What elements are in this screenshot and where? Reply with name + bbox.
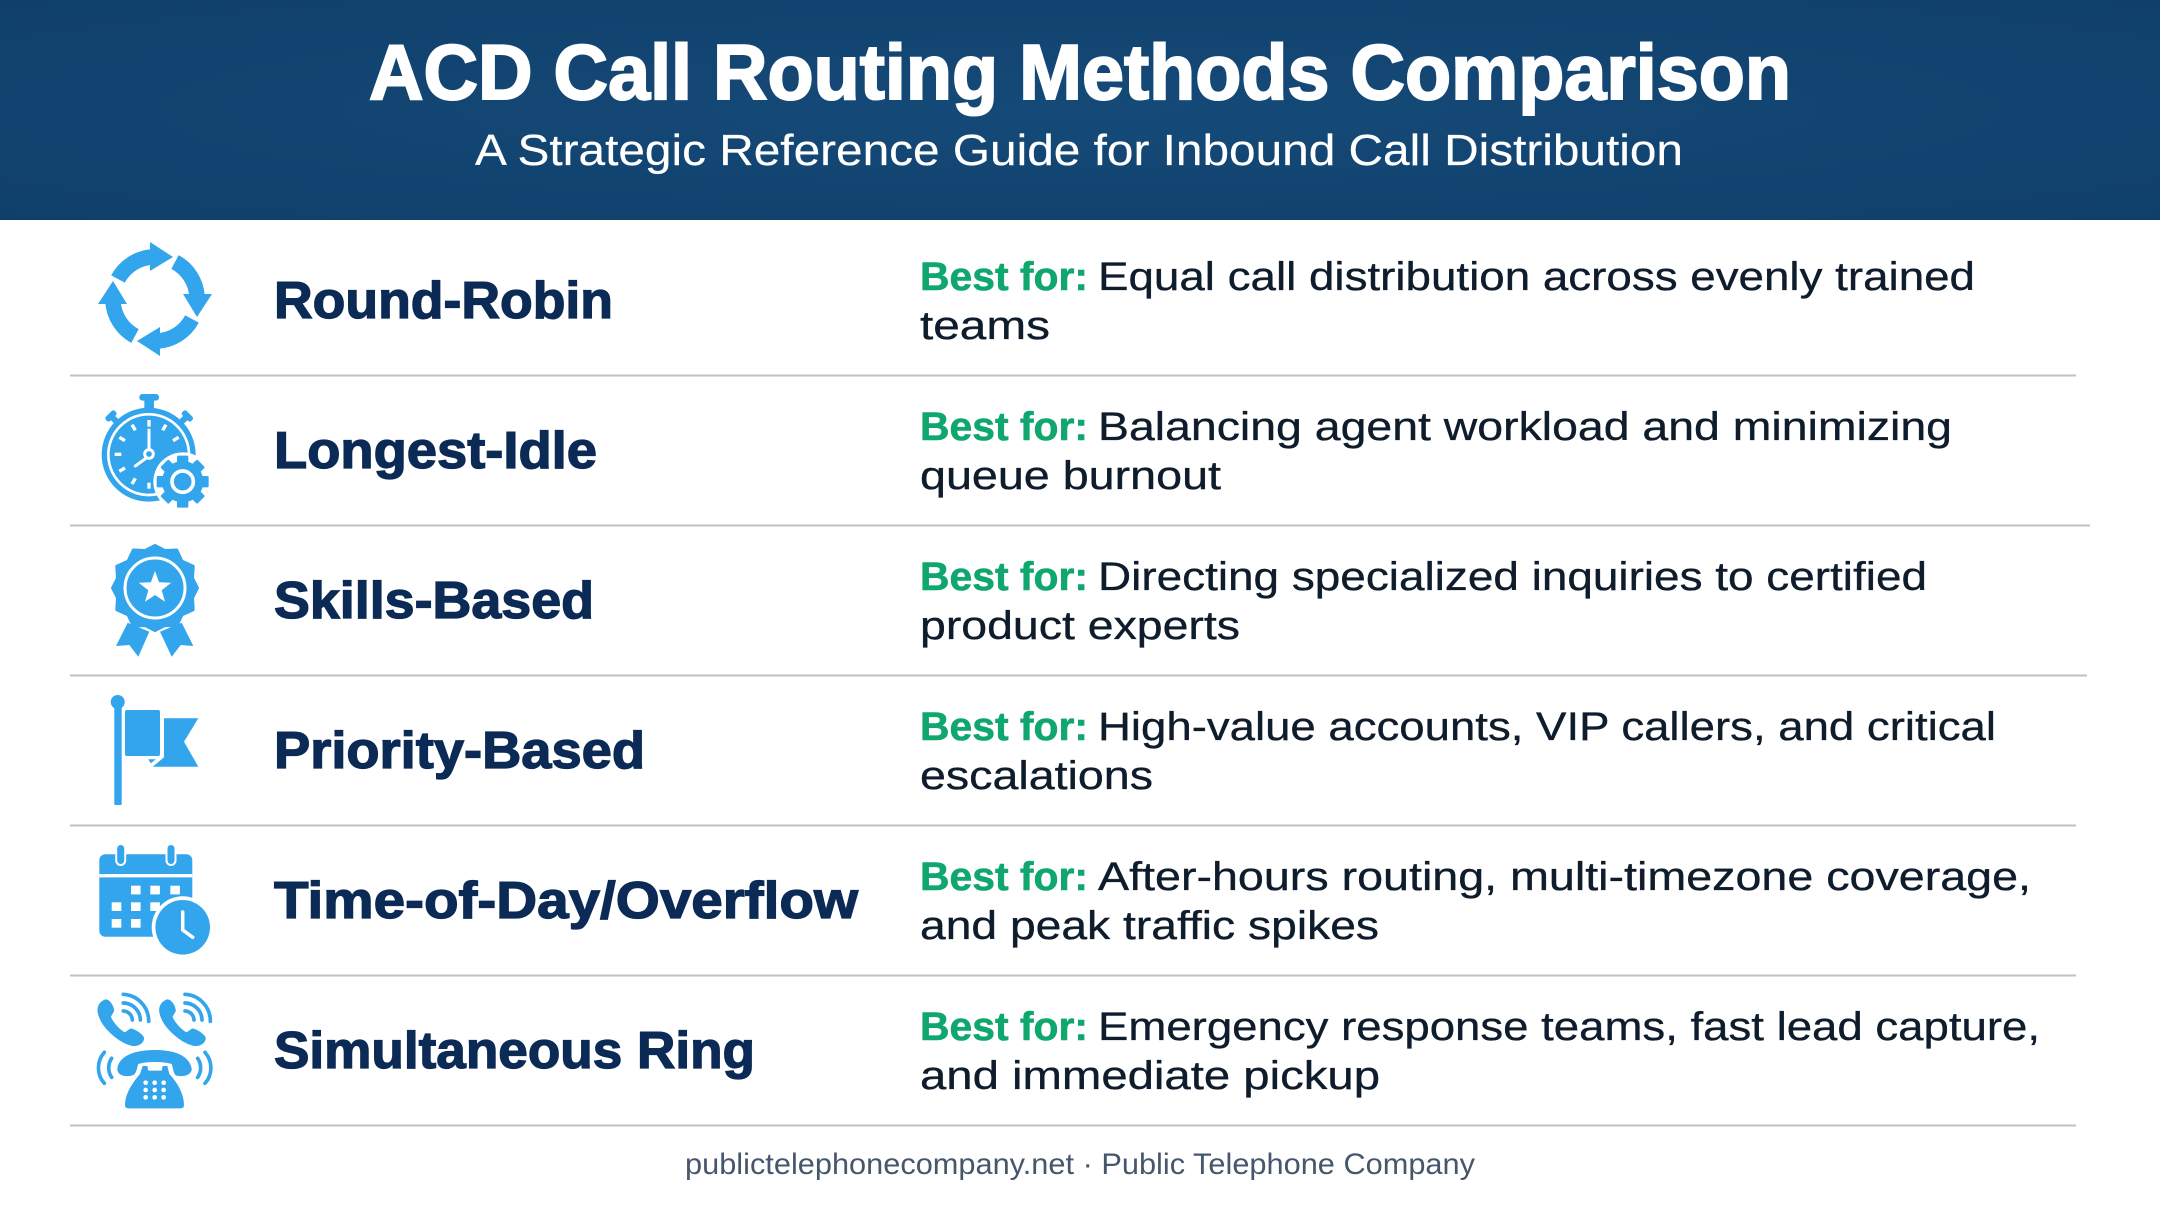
best for text: Best for: — [920, 255, 1088, 299]
row: Skills-Based — [112, 546, 1927, 657]
icon: stopwatch with gear — [102, 394, 212, 511]
best for text: Balancing agent workload and minimizing — [1098, 405, 1952, 449]
icon: award badge — [112, 546, 198, 657]
header banner — [0, 0, 2160, 220]
icon: calendar with clock — [99, 844, 214, 958]
row: Longest-Idle — [102, 394, 1952, 511]
method name: Simultaneous Ring — [274, 1022, 755, 1080]
best for text: escalations — [920, 754, 1153, 798]
title: ACD Call Routing Methods Comparison — [369, 28, 1791, 116]
best for text: product experts — [920, 604, 1240, 648]
best for text — [920, 255, 1975, 348]
best for text: Best for: — [920, 405, 1088, 449]
best for text: Best for: — [920, 555, 1088, 599]
best for text: High-value accounts, VIP callers, and critical — [1098, 705, 1996, 749]
best for text: teams — [920, 304, 1050, 348]
best for text — [920, 405, 1952, 498]
best for text: and peak traffic spikes — [920, 904, 1379, 948]
method name: Time-of-Day/Overflow — [274, 872, 859, 930]
best for text: queue burnout — [920, 454, 1221, 498]
row: Time-of-Day/Overflow — [99, 844, 2031, 958]
method name: Longest-Idle — [274, 422, 597, 480]
best for text: and immediate pickup — [920, 1054, 1380, 1098]
best for text: Best for: — [920, 705, 1088, 749]
best for text — [920, 705, 1996, 798]
best for text — [920, 1005, 2040, 1098]
best for text: Directing specialized inquiries to certified — [1098, 555, 1927, 599]
icon: circular arrows — [98, 242, 212, 356]
best for text: Best for: — [920, 855, 1088, 899]
best for text — [920, 855, 2031, 948]
icon: flag — [111, 695, 198, 805]
best for text: After-hours routing, multi-timezone coverage, — [1098, 855, 2031, 899]
footer credit: publictelephonecompany.net · Public Telephone Company — [685, 1148, 1475, 1181]
method name: Priority-Based — [274, 722, 645, 780]
row: Priority-Based — [111, 695, 1996, 805]
row: Round-Robin — [98, 242, 1975, 356]
method name: Skills-Based — [274, 572, 594, 630]
best for text: Emergency response teams, fast lead capture, — [1098, 1005, 2040, 1049]
best for text — [920, 555, 1927, 648]
subtitle: A Strategic Reference Guide for Inbound Call Distribution — [475, 126, 1683, 175]
method name: Round-Robin — [274, 272, 613, 330]
icon: ringing phones — [98, 994, 211, 1108]
best for text: Equal call distribution across evenly trained — [1098, 255, 1975, 299]
best for text: Best for: — [920, 1005, 1088, 1049]
row: Simultaneous Ring — [98, 994, 2040, 1108]
